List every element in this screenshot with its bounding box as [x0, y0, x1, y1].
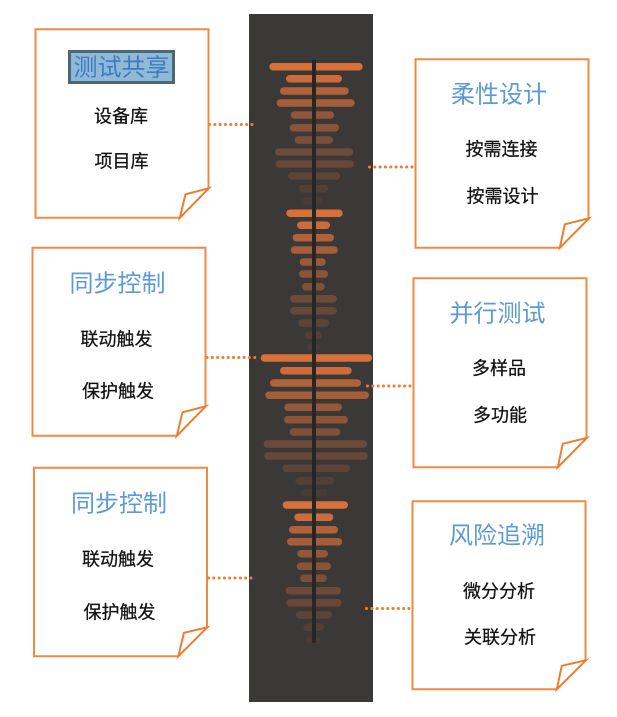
- panel: parallel testing: [414, 278, 587, 467]
- panel: sync control lower: [34, 468, 207, 656]
- item: multi-function: 多功能: [473, 405, 527, 425]
- connector: shared testing: [210, 123, 256, 126]
- heading: 同步控制: [70, 270, 166, 297]
- central axis line: [312, 60, 316, 643]
- item: linked trigger: 联动触发: [82, 549, 154, 569]
- item: differential analysis: 微分分析: [463, 581, 535, 601]
- heading: 测试共享: [74, 54, 170, 81]
- heading: 同步控制: [71, 490, 167, 517]
- waveform group 4: [283, 501, 348, 644]
- item: correlation analysis: 关联分析: [464, 627, 536, 647]
- panel: sync control upper: [32, 248, 206, 436]
- heading: 柔性设计: [451, 81, 547, 108]
- connector: risk tracing: [366, 607, 412, 610]
- item: connect on demand: 按需连接: [466, 139, 538, 159]
- central dark column: [249, 14, 373, 702]
- panel: shared testing: [36, 29, 209, 218]
- waveform group 2: [286, 210, 343, 351]
- heading: 风险追溯: [449, 522, 545, 549]
- item: protection trigger: 保护触发: [84, 602, 156, 622]
- item: equipment library: 设备库: [94, 106, 148, 126]
- item: protection trigger: 保护触发: [82, 381, 154, 401]
- connector: sync control 2: [208, 576, 256, 580]
- waveform group 3: [261, 354, 372, 496]
- item: project library: 项目库: [94, 151, 148, 171]
- panel: risk tracing: [412, 501, 586, 689]
- heading: 并行测试: [450, 300, 546, 327]
- heading highlight: [70, 52, 174, 82]
- item: design on demand: 按需设计: [466, 186, 538, 206]
- connector: parallel testing: [368, 384, 413, 388]
- panel: flexible design: [416, 59, 589, 248]
- connector: sync control 1: [207, 356, 255, 359]
- waveform group 1: [269, 63, 363, 205]
- connector: flexible design: [370, 166, 415, 168]
- item: multi-sample: 多样品: [472, 358, 526, 378]
- item: linked trigger: 联动触发: [80, 329, 152, 349]
- waveform chart: [261, 63, 372, 644]
